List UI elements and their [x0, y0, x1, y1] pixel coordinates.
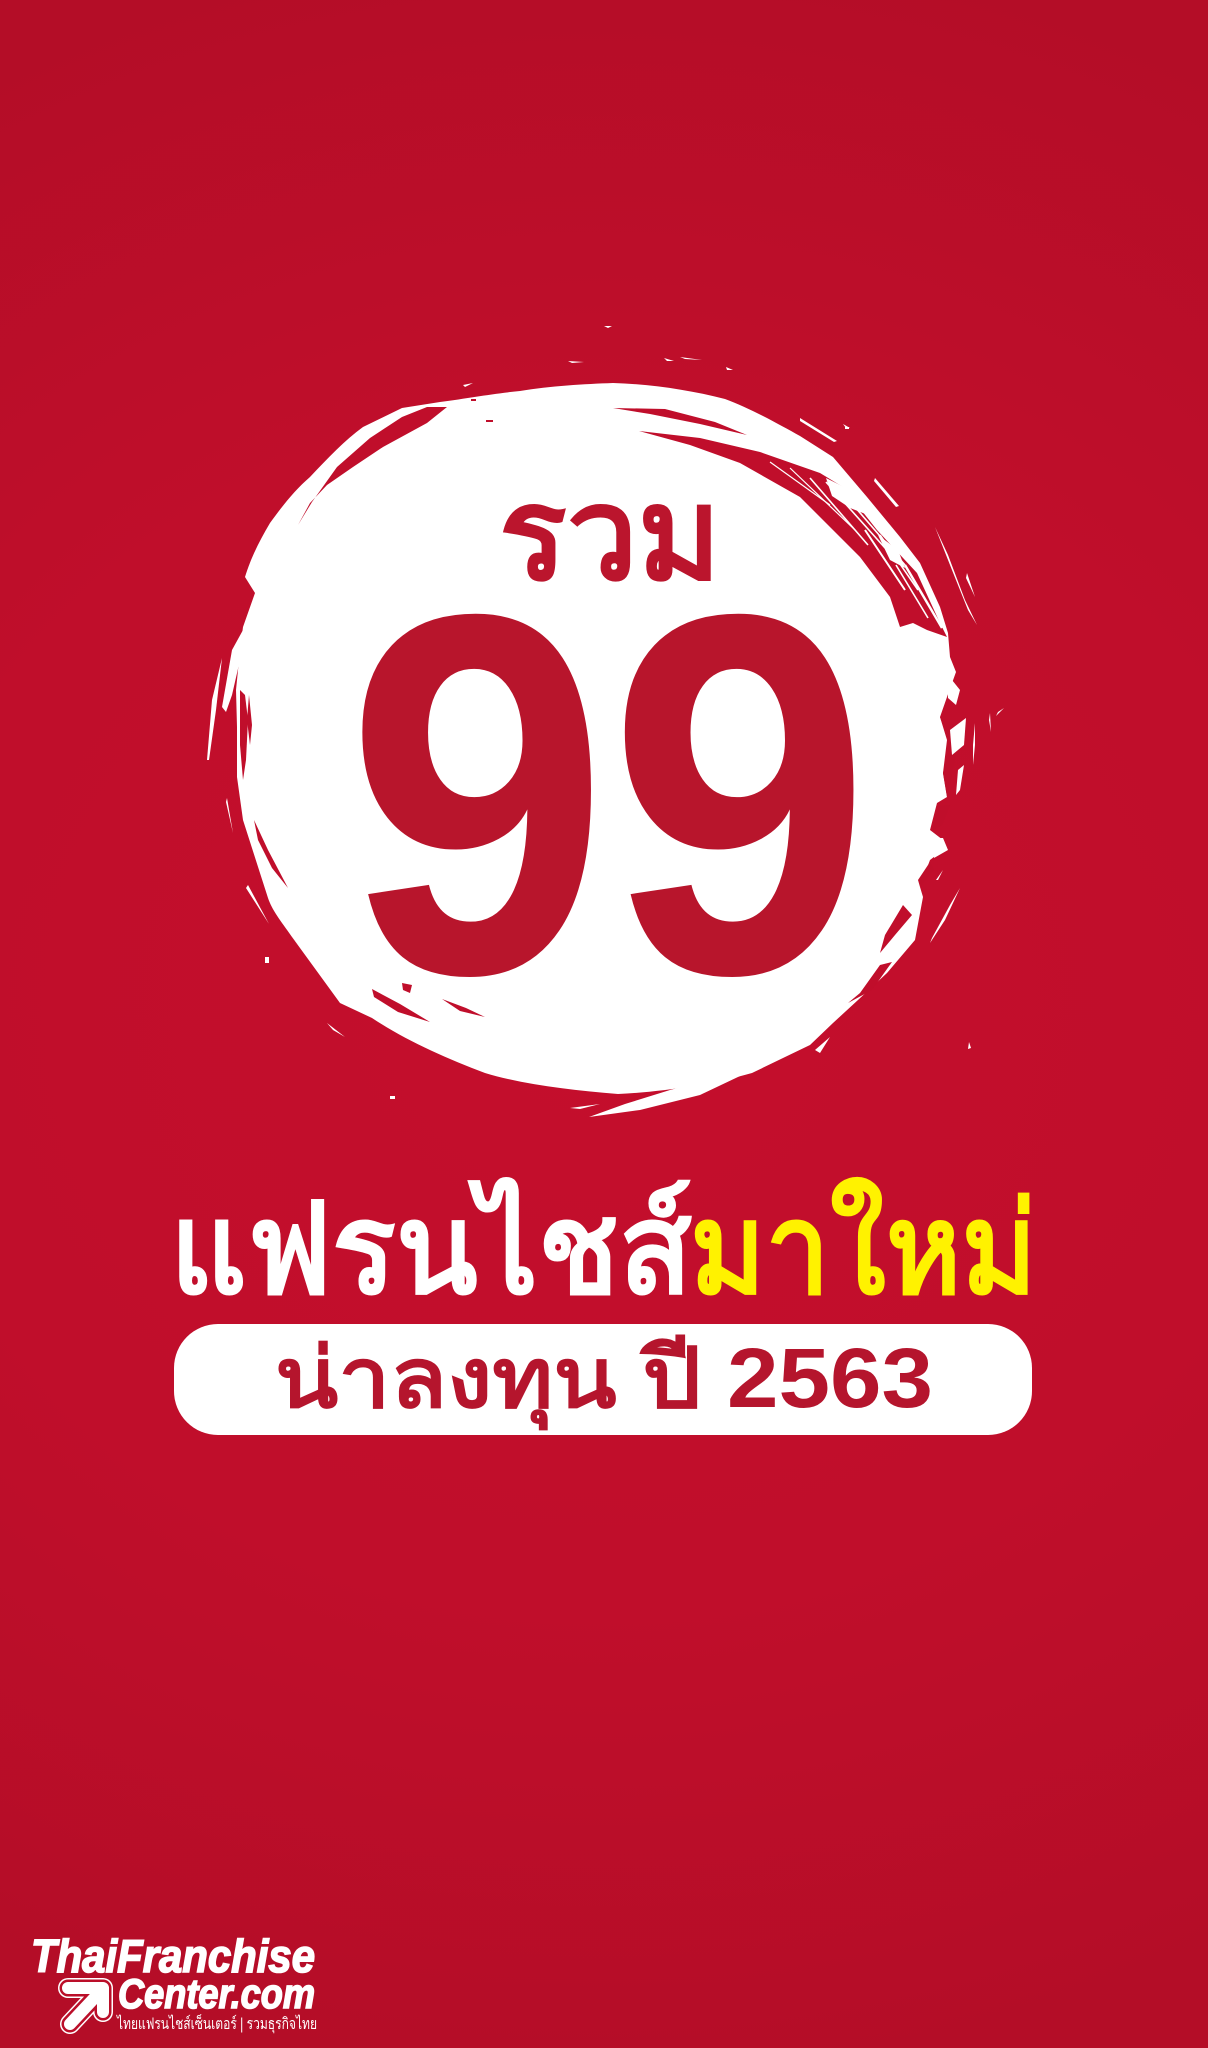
subtitle pill	[174, 1324, 1032, 1435]
subtitle text: น่าลงทุน ปี 2563	[275, 1331, 933, 1431]
brush streaks inside circle	[240, 399, 962, 1022]
brush hatching	[770, 462, 942, 628]
big number 99: 99	[346, 509, 871, 1081]
logo	[31, 1930, 317, 2034]
logo tagline: ไทยแฟรนไชส์เซ็นเตอร์ | รวมธุรกิจไทย	[115, 2013, 317, 2034]
brush flecks outside circle	[207, 326, 1004, 1117]
heading	[170, 1177, 1037, 1320]
logo wordmark line 1: ThaiFranchise	[31, 1930, 315, 1982]
icon: logo arrow	[68, 1988, 103, 2024]
brush circle	[207, 326, 1004, 1117]
heading white part: แฟรนไชส์	[170, 1177, 692, 1320]
logo wordmark line 2: Center.com	[118, 1970, 315, 2017]
label: รวม: รวม	[499, 461, 721, 607]
heading yellow part: มาใหม่	[690, 1177, 1037, 1320]
brush patches	[826, 478, 966, 858]
